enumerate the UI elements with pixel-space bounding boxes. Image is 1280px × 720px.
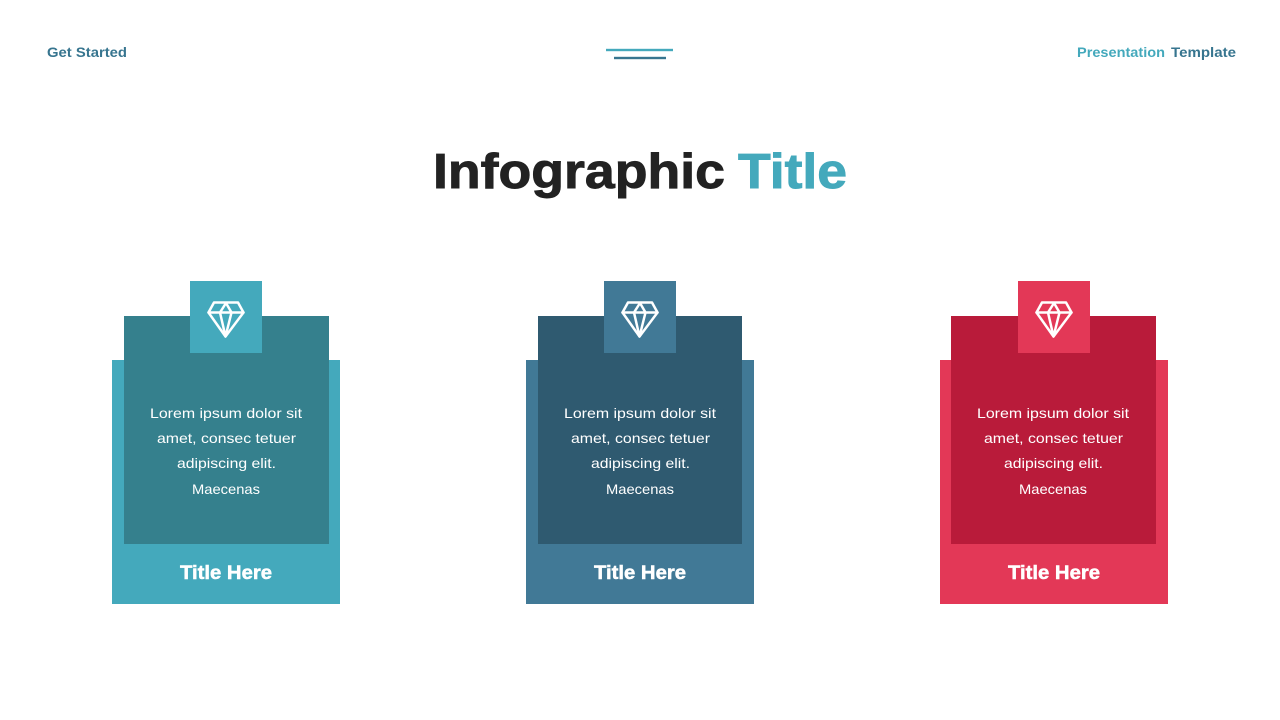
card 2 body text: Maecenas bbox=[606, 481, 674, 497]
card 3 title: Title Here bbox=[1008, 562, 1100, 584]
card 3 body text: amet, consec tetuer bbox=[984, 430, 1123, 446]
card 3 body text bbox=[977, 405, 1129, 497]
card 1 title: Title Here bbox=[180, 562, 272, 584]
card 1 outer panel bbox=[112, 360, 340, 604]
card 2 outer panel bbox=[526, 360, 754, 604]
card 3 icon tile bbox=[1018, 281, 1090, 353]
card 1 inner panel bbox=[124, 316, 329, 544]
icon: diamond 3 bbox=[1036, 302, 1072, 336]
card 2 inner panel bbox=[538, 316, 742, 544]
card 2 icon tile bbox=[604, 281, 676, 353]
header: presentation template: Presentation bbox=[1077, 44, 1165, 60]
card 2 body text: adipiscing elit. bbox=[591, 455, 690, 471]
card 3 outer panel bbox=[940, 360, 1168, 604]
header: presentation template: Template bbox=[1171, 44, 1236, 60]
title: Title bbox=[738, 145, 847, 199]
card 2 body text: amet, consec tetuer bbox=[571, 430, 710, 446]
card 3 body text: Lorem ipsum dolor sit bbox=[977, 405, 1129, 421]
icon: diamond 1 bbox=[208, 302, 244, 336]
card 2 body text bbox=[564, 405, 716, 497]
card 3 body text: Maecenas bbox=[1019, 481, 1087, 497]
header: get started: Get Started bbox=[47, 44, 127, 60]
header: presentation template bbox=[1077, 44, 1236, 60]
header: center double line bbox=[606, 49, 673, 59]
card 1 body text bbox=[150, 405, 302, 497]
panel: card 2 bbox=[526, 281, 754, 604]
card 3 body text: adipiscing elit. bbox=[1004, 455, 1103, 471]
card 2 title: Title Here bbox=[594, 562, 686, 584]
card 1 body text: Lorem ipsum dolor sit bbox=[150, 405, 302, 421]
card 1 body text: Maecenas bbox=[192, 481, 260, 497]
card 1 body text: amet, consec tetuer bbox=[157, 430, 296, 446]
icon: diamond 2 bbox=[622, 302, 658, 336]
panel: card 1 bbox=[112, 281, 340, 604]
title bbox=[433, 145, 847, 199]
card 3 inner panel bbox=[951, 316, 1156, 544]
panel: card 3 bbox=[940, 281, 1168, 604]
card 2 body text: Lorem ipsum dolor sit bbox=[564, 405, 716, 421]
title: Infographic bbox=[433, 145, 725, 199]
card 1 icon tile bbox=[190, 281, 262, 353]
card 1 body text: adipiscing elit. bbox=[177, 455, 276, 471]
